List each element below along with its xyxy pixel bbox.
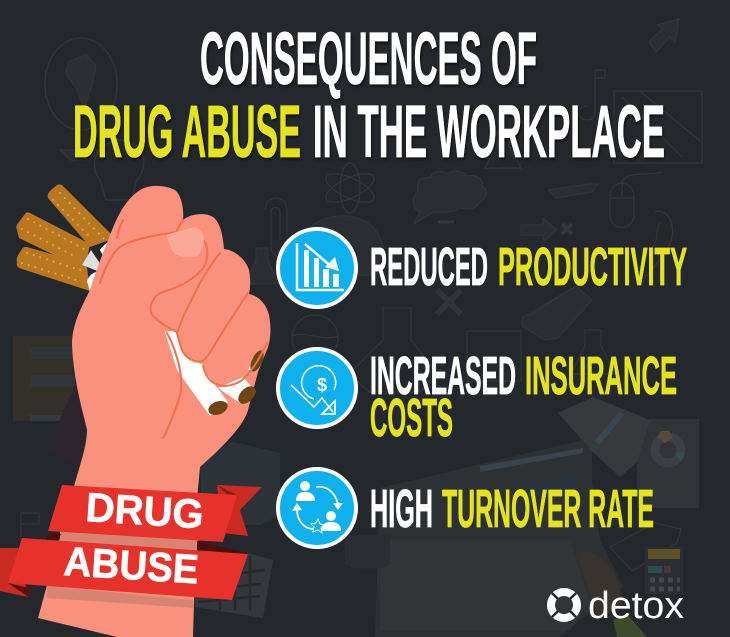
lower ribbon fold [8,583,33,597]
item: increased insurance costs [278,346,677,448]
doodle: small flask [571,330,615,374]
doodle: pencil [548,184,598,198]
thumb highlight [166,227,204,257]
doodle: arrow top right [649,19,679,52]
lower ribbon tail [0,548,28,597]
doodle: arrow right [521,218,557,242]
doodle: speech cloud [413,171,486,224]
doodle: tablet [610,523,681,571]
title [73,17,665,173]
upper ribbon tail [217,485,262,536]
doodle: apple [290,216,384,275]
item: reduced productivity [278,229,687,307]
doodle: coffee cup [345,535,390,569]
logo: detox [551,585,684,627]
wordmark: detox [588,585,684,627]
title: DRUG ABUSE [73,90,301,173]
illustration: fist crushing cigarettes [16,184,270,637]
doodle: cross [562,224,572,234]
item: reduced productivity: REDUCED [370,237,488,297]
doodle: lightbulb [94,140,144,200]
item: increased insurance costs: COSTS [370,388,453,448]
finger creases [100,220,267,438]
doodle: charts pages [558,397,699,540]
lower ribbon [8,538,248,600]
icon: falling bar chart [278,229,356,307]
doodle: round flask [292,315,338,361]
doodle: music note [579,70,605,120]
doodle: flag [21,513,39,547]
doodle: flask top [485,132,521,168]
banner: drug abuse [0,484,262,608]
crumpled cigarette paper [82,239,123,292]
doodle: phone [643,212,673,278]
cigarette ends [206,398,230,418]
doodle: calculator [645,547,683,594]
label: abuse: ABUSE [62,538,200,592]
item: high turnover rate: HIGH [370,479,433,539]
hand [38,186,270,637]
doodle: laptop [375,440,623,637]
doodle: sleeve and hand [613,614,647,637]
upper ribbon fold [217,485,237,501]
doodle: board [614,91,702,163]
doodle: big x [437,290,461,314]
doodle: book [522,286,592,340]
label: drug: DRUG [84,484,205,537]
item: increased insurance costs: INCREASED [370,346,516,406]
doodle: dark keyboard block [200,441,280,525]
band shadow on wrist [47,531,198,608]
crushed cigarette between fingers [165,330,266,418]
doodle: paperclip [265,198,287,256]
doodle: divide sign [438,220,454,224]
cigarette filters [16,184,115,291]
doodle: left book [13,336,94,470]
doodle: flask left [246,248,278,284]
doodle: keyboard [195,553,273,618]
icon: lifebuoy [551,592,577,618]
fold shadows [46,533,247,554]
icon: falling dollar [278,349,356,427]
doodle: globe [45,38,117,160]
icon: falling dollar: $ [317,375,327,395]
doodle: mouse [610,172,662,228]
doodle: cone flask [349,308,439,392]
upper ribbon [48,485,237,542]
item: high turnover rate [278,469,654,547]
doodle: notes pad [467,331,521,381]
icon: staff rotation [278,469,356,547]
doodle: atom [322,163,378,213]
